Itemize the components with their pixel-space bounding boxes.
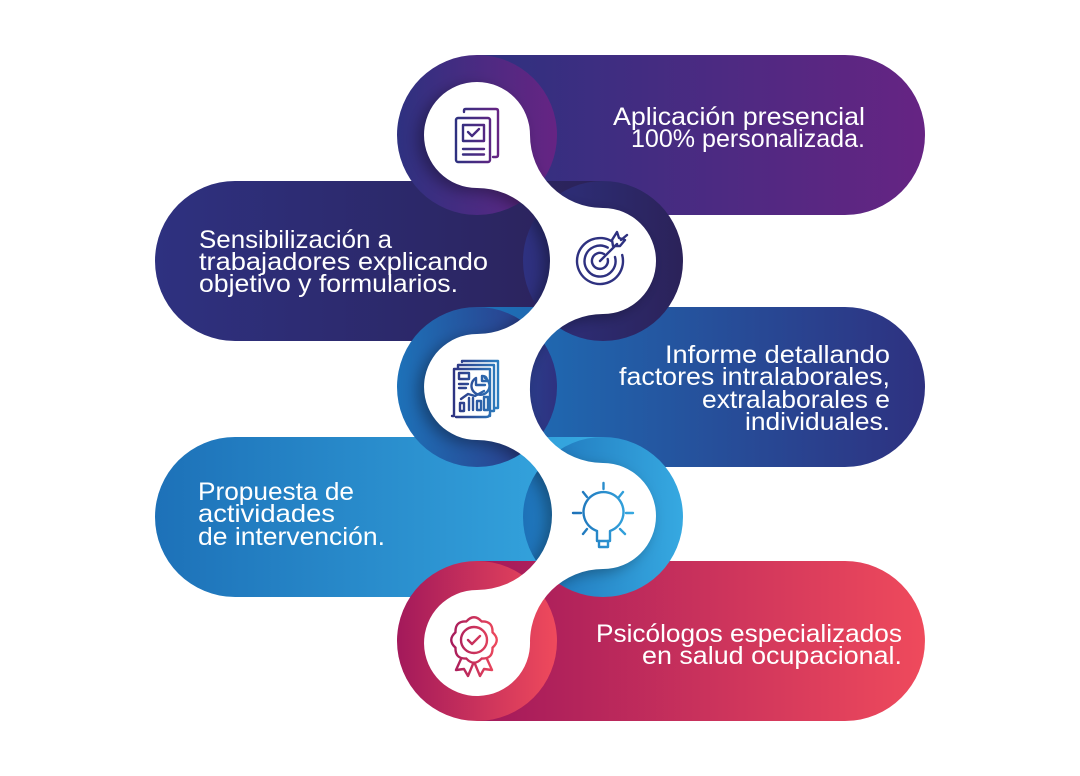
text: step 2 — [199, 226, 488, 298]
ring: step 1 — [397, 55, 557, 215]
text: step 3: Informe detallando — [665, 341, 890, 369]
icon: document with checkbox — [456, 109, 498, 162]
ring: step 3 — [397, 307, 557, 467]
panel: step 1 pill — [477, 55, 925, 215]
text: step 3: extralaborales e — [702, 386, 890, 414]
text: step 4: de intervención. — [198, 523, 385, 551]
text: step 3: factores intralaborales, — [619, 363, 890, 391]
ring: step 5 — [397, 561, 557, 721]
icon: light bulb — [573, 483, 633, 547]
panel: step 3 pill — [477, 307, 925, 467]
text: step 2: Sensibilización a — [199, 226, 392, 254]
icon: target with arrow — [577, 232, 627, 284]
icon: award badge — [451, 617, 497, 676]
channel shadow — [412, 80, 658, 588]
text: step 5 — [596, 620, 902, 670]
text: step 2: objetivo y formularios. — [199, 270, 458, 298]
text: step 4 — [198, 478, 385, 551]
icon: report pages with charts — [452, 361, 498, 417]
panel: step 4 pill — [155, 437, 603, 597]
text: step 4: Propuesta de — [198, 478, 354, 506]
text: step 4: actividades — [198, 500, 335, 528]
text: step 5: Psicólogos especializados — [596, 620, 902, 648]
white serpentine channel — [424, 82, 656, 696]
panel: step 5 pill — [477, 561, 925, 721]
text: step 1 — [613, 103, 865, 153]
ring: step 2 — [523, 181, 683, 341]
text: step 5: en salud ocupacional. — [642, 642, 902, 670]
text: step 3 — [619, 341, 890, 436]
text: step 1: Aplicación presencial — [613, 103, 865, 131]
text: step 2: trabajadores explicando — [199, 248, 488, 276]
panel: step 2 pill — [155, 181, 603, 341]
infographic — [155, 55, 925, 721]
text: step 3: individuales. — [745, 408, 890, 436]
text: step 1: 100% personalizada. — [631, 125, 865, 153]
ring: step 4 — [523, 437, 683, 597]
